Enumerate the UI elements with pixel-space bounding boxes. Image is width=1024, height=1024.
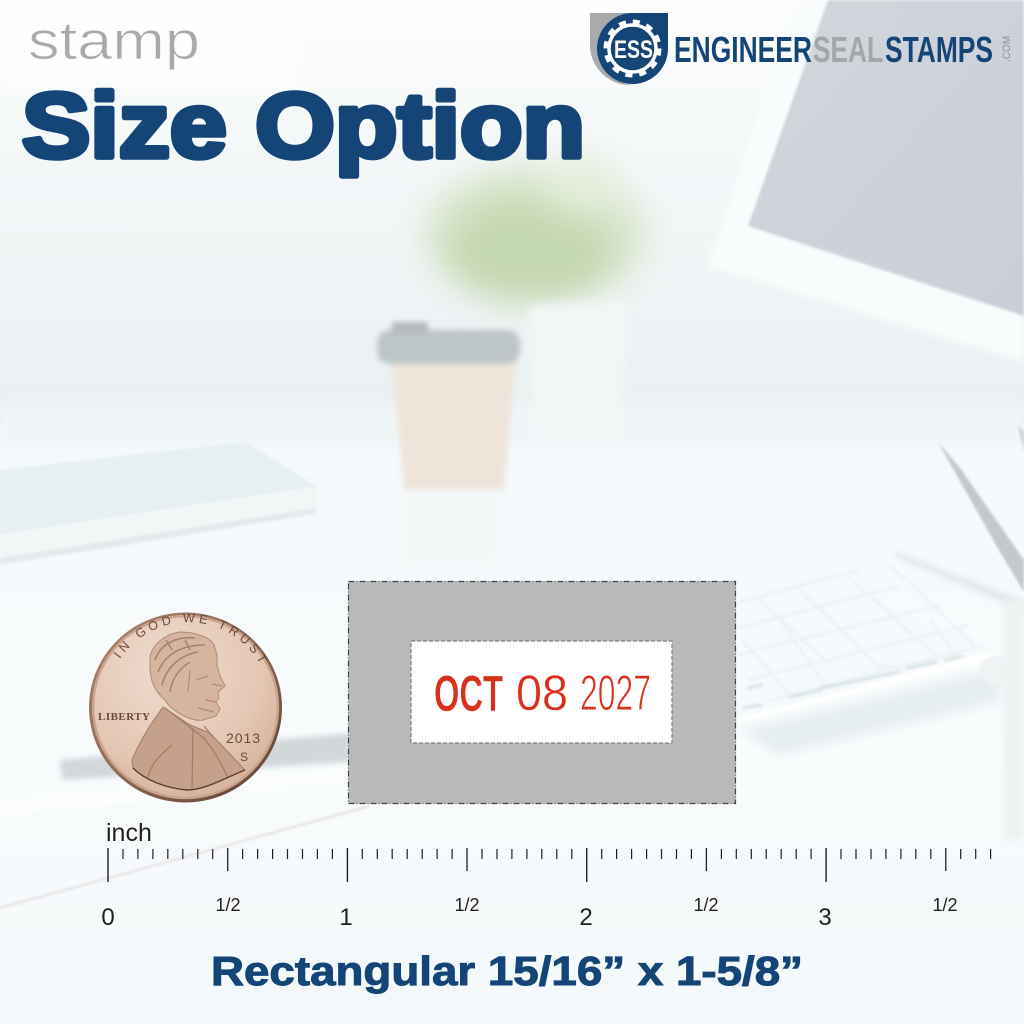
ruler inch labels: 0: [101, 904, 115, 931]
logo emblem: gear badge: [590, 13, 668, 85]
ruler half-inch labels: 1/2: [215, 895, 241, 915]
coin face: [93, 616, 278, 798]
ruler minor ticks: [123, 849, 991, 859]
monitor: [708, 0, 1024, 362]
title: Size Option: Size Option: [22, 75, 585, 177]
penny size reference: [89, 612, 282, 802]
date: OCT: OCT: [434, 665, 503, 722]
logo emblem: gear badge: ESS: [614, 36, 653, 64]
ruler: [101, 819, 991, 931]
logo wordmark: seal: SEAL: [813, 29, 883, 70]
pen behind coin: [0, 733, 350, 815]
ruler inch labels: [101, 904, 832, 931]
plant pot: [528, 300, 628, 440]
pencils: [893, 425, 1024, 840]
table edge reflection: [0, 806, 370, 908]
ruler unit: inch: [106, 819, 152, 847]
logo wordmark: engineer: ENGINEER: [674, 29, 812, 70]
plant: [423, 155, 647, 305]
coin motto: IN GOD WE TRUST: [114, 614, 267, 662]
stamp outline panel: [348, 582, 736, 804]
date: 08: 08: [516, 665, 568, 721]
ruler half-inch labels: 1/2: [454, 895, 480, 915]
coin mint mark: S: [240, 750, 248, 764]
ruler half-inch ticks: [228, 848, 946, 871]
impression area: [411, 641, 672, 743]
coin rim: [89, 612, 282, 802]
coin label: liberty: LIBERTY: [98, 711, 150, 723]
keyboard: [515, 505, 1011, 755]
notebook: [0, 442, 318, 565]
Lincoln bust: [132, 632, 245, 790]
ruler half-inch labels: 1/2: [932, 895, 958, 915]
ruler inch labels: 2: [579, 904, 593, 931]
coffee cup: [377, 322, 520, 564]
coin year: 2013: [226, 730, 260, 746]
outer mount: gray: [348, 582, 736, 804]
ruler inch labels: 1: [339, 904, 353, 931]
logo: Engineer Seal Stamps: [590, 13, 1013, 85]
date: 2027: 2027: [580, 665, 651, 721]
subtitle: stamp: stamp: [28, 11, 200, 71]
ruler half-inch labels: 1/2: [693, 895, 719, 915]
ruler half-inch labels: [215, 895, 958, 915]
ruler inch ticks: [108, 848, 826, 882]
logo wordmark: .com: .COM: [1001, 36, 1013, 62]
dimensions caption: Rectangular 15/16” x 1-5/8”: [211, 948, 803, 994]
ruler inch labels: 3: [818, 904, 832, 931]
